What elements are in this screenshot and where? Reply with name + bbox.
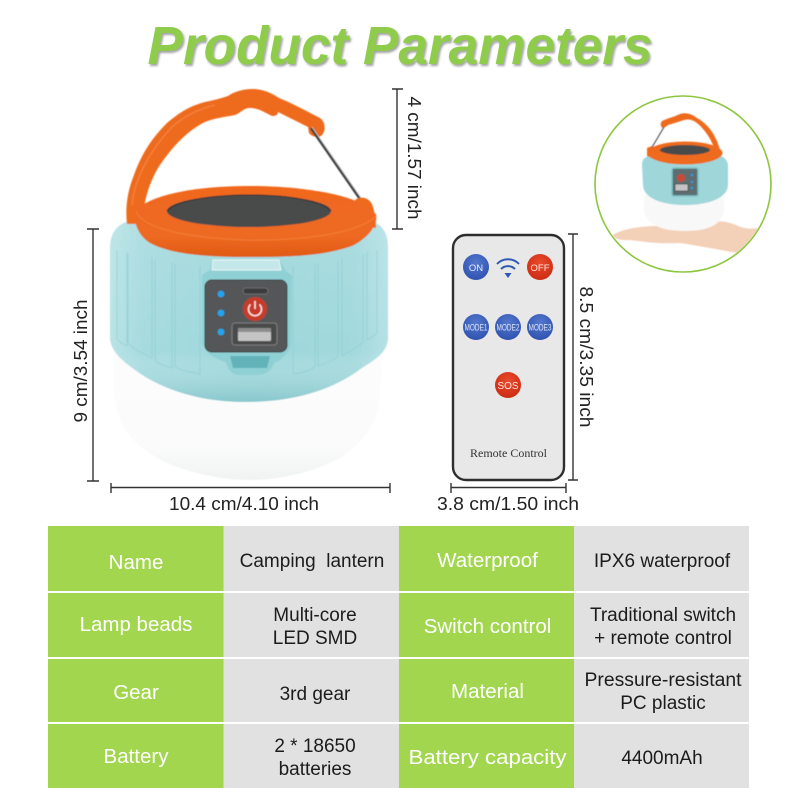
dimension: lantern width [111,483,390,514]
dimension: remote height: 8.5 cm/3.35 inch [576,286,596,428]
row 4: battery and battery capacity: batteries [279,759,351,780]
row 4: battery and battery capacity: 2 * 18650 [274,736,356,757]
MODE1 button: MODE1 [464,322,488,332]
mini lid [648,142,722,164]
OFF button: OFF [530,263,550,274]
row 2: lamp beads and switch control: + remote control [594,628,732,649]
USB port [232,323,277,345]
MODE1 button [463,314,489,340]
inset circle: lantern on hand [595,96,771,272]
row 2: lamp beads and switch control: Multi-core [273,605,357,626]
row 2: lamp beads and switch control [48,593,749,657]
row 4: battery and battery capacity: Battery capacity [408,746,567,769]
row 3: gear and material: Material [451,680,524,703]
icon: wireless signal [497,259,519,278]
hand [613,221,758,253]
row 2: lamp beads and switch control: Switch control [424,615,551,638]
mini handle [661,113,720,150]
SOS button [495,372,521,398]
row 1: name and waterproof: Name [109,551,163,574]
lantern illustration [110,89,388,480]
title: Product Parameters [148,16,652,76]
row 3: gear and material [48,659,749,722]
dimension: remote height [568,234,596,480]
dimension: handle height [392,89,424,229]
solar panel [167,195,331,227]
MODE3 button [527,314,553,340]
SOS button: SOS [497,381,519,392]
OFF button [527,254,553,280]
dimension: remote width [437,483,579,514]
row 3: gear and material: PC plastic [620,693,706,714]
row 4: battery and battery capacity: Battery [104,745,169,768]
remote control [453,235,564,480]
MODE3 button: MODE3 [528,322,552,332]
mini lantern body [642,155,728,205]
remote label: Remote Control [470,446,548,460]
row 3: gear and material: Gear [113,681,159,704]
mini control panel [672,168,698,196]
row 1: name and waterproof: Camping lantern [240,551,384,572]
dimension: body height [71,229,99,481]
power button [243,297,267,321]
handle [126,89,325,224]
row 3: gear and material: Pressure-resistant [584,670,742,691]
body ribs [117,250,377,374]
ON button: ON [469,263,483,274]
MODE2 button [495,314,521,340]
dimension: remote width: 3.8 cm/1.50 inch [437,494,579,514]
control cover [202,260,292,375]
row 4: battery and battery capacity [48,724,749,788]
micro USB port [243,288,268,294]
mini lantern base [656,221,719,232]
row 1: name and waterproof: IPX6 waterproof [594,551,731,572]
row 2: lamp beads and switch control: Traditional switch [590,605,736,626]
lantern blue body [110,220,388,402]
carabiner wire [311,128,369,212]
lid with solar panel [135,186,376,257]
MODE2 button: MODE2 [496,322,520,332]
parameter table [48,526,749,788]
dimension: handle height: 4 cm/1.57 inch [404,96,424,220]
lantern base light [113,340,383,480]
row 1: name and waterproof: Waterproof [437,549,538,572]
row 1: name and waterproof [48,526,749,591]
mini wire [651,127,664,149]
row 4: battery and battery capacity: 4400mAh [621,748,703,769]
row 2: lamp beads and switch control: LED SMD [273,628,357,649]
dimension: lantern width: 10.4 cm/4.10 inch [169,494,319,514]
row 3: gear and material: 3rd gear [280,684,351,705]
indicator LEDs [218,291,224,335]
ON button [463,254,489,280]
control panel [205,280,287,352]
row 2: lamp beads and switch control: Lamp beads [80,613,192,636]
dimension: body height: 9 cm/3.54 inch [71,299,91,423]
